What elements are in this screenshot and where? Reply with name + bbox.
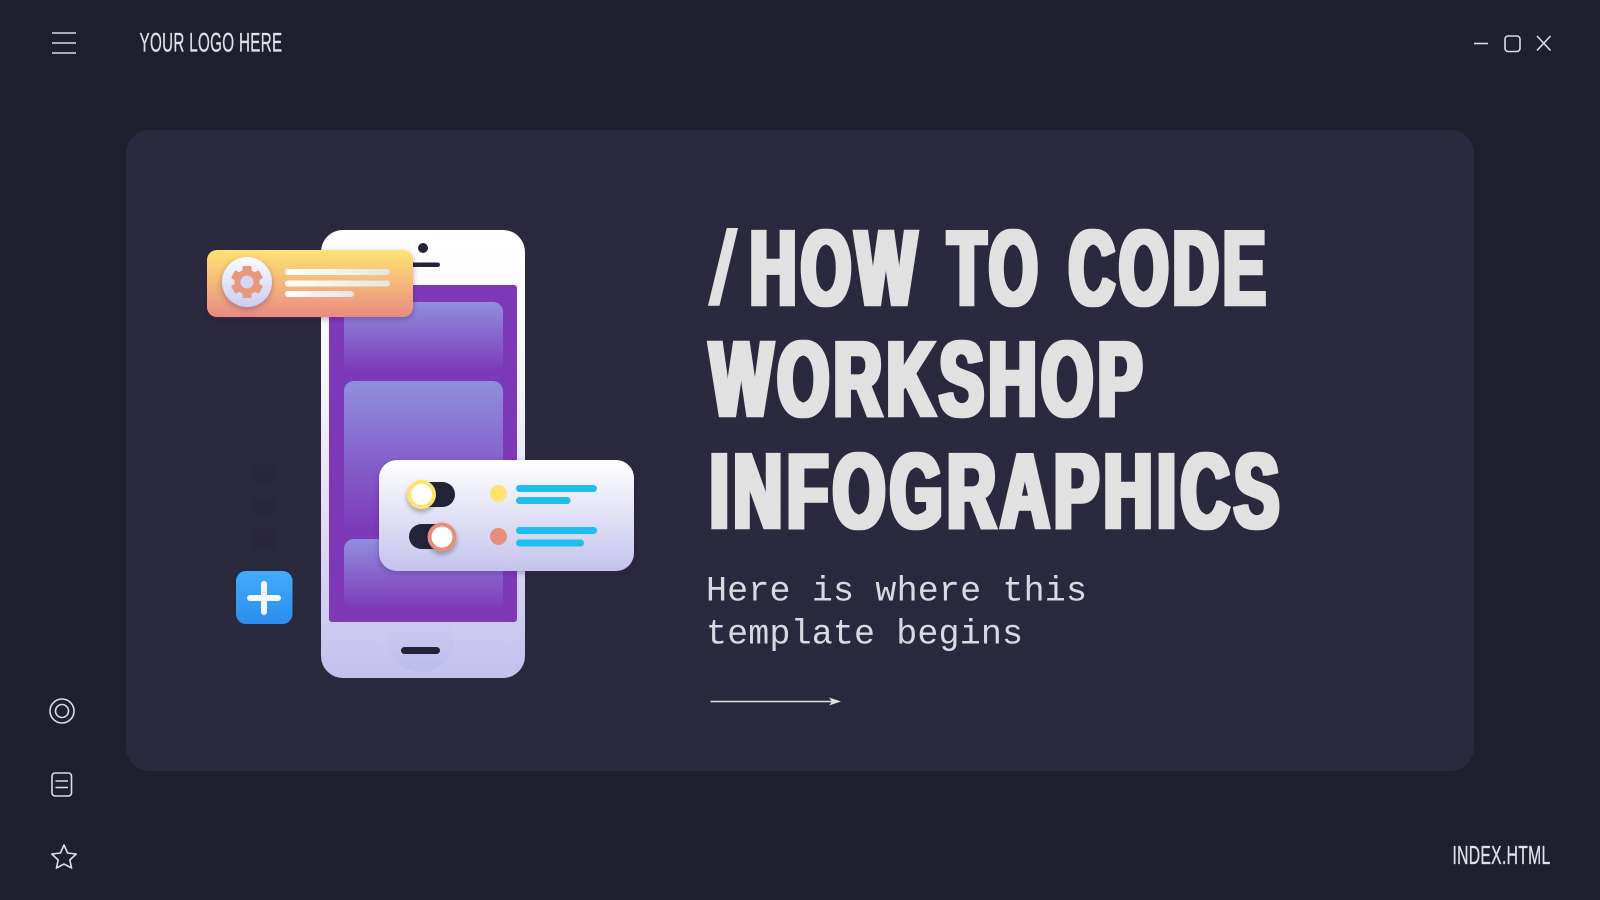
cyan text lines: [516, 485, 597, 546]
icon: gear: [222, 257, 272, 307]
title: WORKSHOP: [710, 320, 1147, 438]
title: [710, 210, 1284, 550]
toggle 1: [407, 480, 455, 509]
title: HOW: [750, 210, 921, 328]
subtitle: [706, 572, 1087, 654]
notification background: [207, 250, 413, 317]
icon: window controls: [1474, 36, 1550, 52]
screen card 1: [344, 302, 503, 372]
icon: hamburger menu: [52, 33, 76, 53]
phone camera: [418, 243, 428, 253]
toggle 2: [409, 522, 456, 552]
title: CODE: [1069, 210, 1270, 328]
phone screen: [329, 285, 517, 622]
icon: plus button: [236, 571, 292, 624]
neumorphic dots: [253, 459, 275, 548]
settings background: [379, 460, 634, 571]
phone speaker: [406, 262, 440, 267]
logo text: YOUR LOGO HERE: [140, 28, 282, 58]
icon: target circle: [50, 699, 74, 723]
notification text lines: [285, 269, 390, 297]
screen card 3: [344, 539, 503, 609]
notification card: [207, 250, 413, 317]
phone body: [321, 230, 525, 678]
illustration: phone and UI cards: [207, 230, 634, 678]
phone home circle: [388, 606, 454, 672]
panel: main card: [126, 130, 1474, 771]
settings card: [379, 460, 634, 571]
subtitle: template begins: [706, 614, 1023, 654]
screen card 2: [344, 381, 503, 531]
title: TO: [948, 210, 1042, 328]
orange dot: [490, 528, 507, 545]
title: INFOGRAPHICS: [710, 432, 1284, 550]
subtitle: Here is where this: [706, 572, 1087, 612]
yellow dot: [490, 485, 507, 502]
title: /: [710, 210, 736, 328]
icon: document: [52, 773, 72, 796]
arrow: [710, 698, 841, 706]
phone home button: [401, 647, 440, 654]
icon: star: [52, 845, 76, 868]
